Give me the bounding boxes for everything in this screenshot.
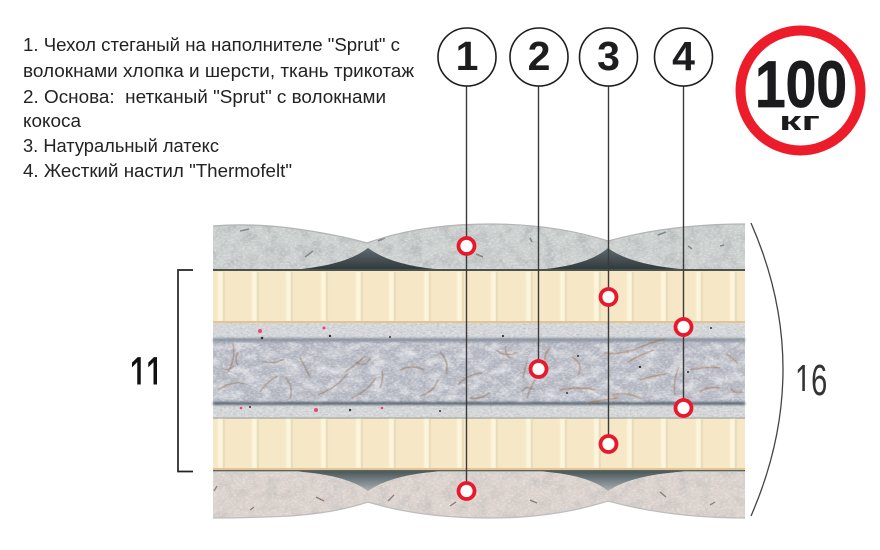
top quilted cover layer (213, 222, 745, 272)
legend text (23, 35, 414, 181)
icon: 100 kg load sign: 100 (755, 47, 847, 121)
bottom quilted cover layer (213, 470, 745, 520)
callout 1: numbered circle, leader line and markers (438, 28, 496, 499)
legend text: 2. Основа: нетканый "Sprut" с волокнами (23, 87, 386, 107)
legend text: кокоса (23, 111, 82, 131)
arc: total height 16: 16 (795, 355, 827, 404)
callout 2: numbered circle, leader line and marker: 2 (528, 33, 550, 79)
icon: 100 kg load sign: кг (779, 106, 820, 136)
bottom mesh gaps (290, 471, 445, 491)
bracket: core height 11 (125, 270, 193, 472)
icon: 100 kg load sign (740, 30, 860, 150)
pink specks (240, 326, 383, 412)
callout 4: numbered circle, leader line and markers (654, 28, 712, 416)
callout 3: numbered circle, leader line and markers: 3 (597, 33, 620, 79)
callout 4: numbered circle, leader line and markers: 4 (672, 33, 695, 79)
callout 2: numbered circle, leader line and marker (510, 28, 568, 377)
legend text: 1. Чехол стеганый на наполнителе "Sprut" с (23, 35, 400, 55)
bracket: core height 11: 11 (129, 348, 164, 400)
callout 1: numbered circle, leader line and markers: 1 (456, 33, 478, 79)
fibre specks (249, 327, 712, 412)
top mesh gaps (290, 248, 445, 270)
upper latex layer (213, 271, 745, 323)
coconut fibres (218, 339, 742, 402)
core: felt and coconut fibre (213, 323, 745, 418)
lower latex layer (213, 417, 745, 470)
callout 3: numbered circle, leader line and markers (580, 28, 638, 452)
legend text: 4. Жесткий настил "Thermofelt" (23, 161, 292, 181)
legend text: волокнами хлопка и шерсти, ткань трикотаж (23, 61, 414, 81)
mattress cross-section (213, 222, 745, 520)
legend text: 3. Натуральный латекс (23, 136, 219, 156)
arc: total height 16 (751, 223, 827, 516)
